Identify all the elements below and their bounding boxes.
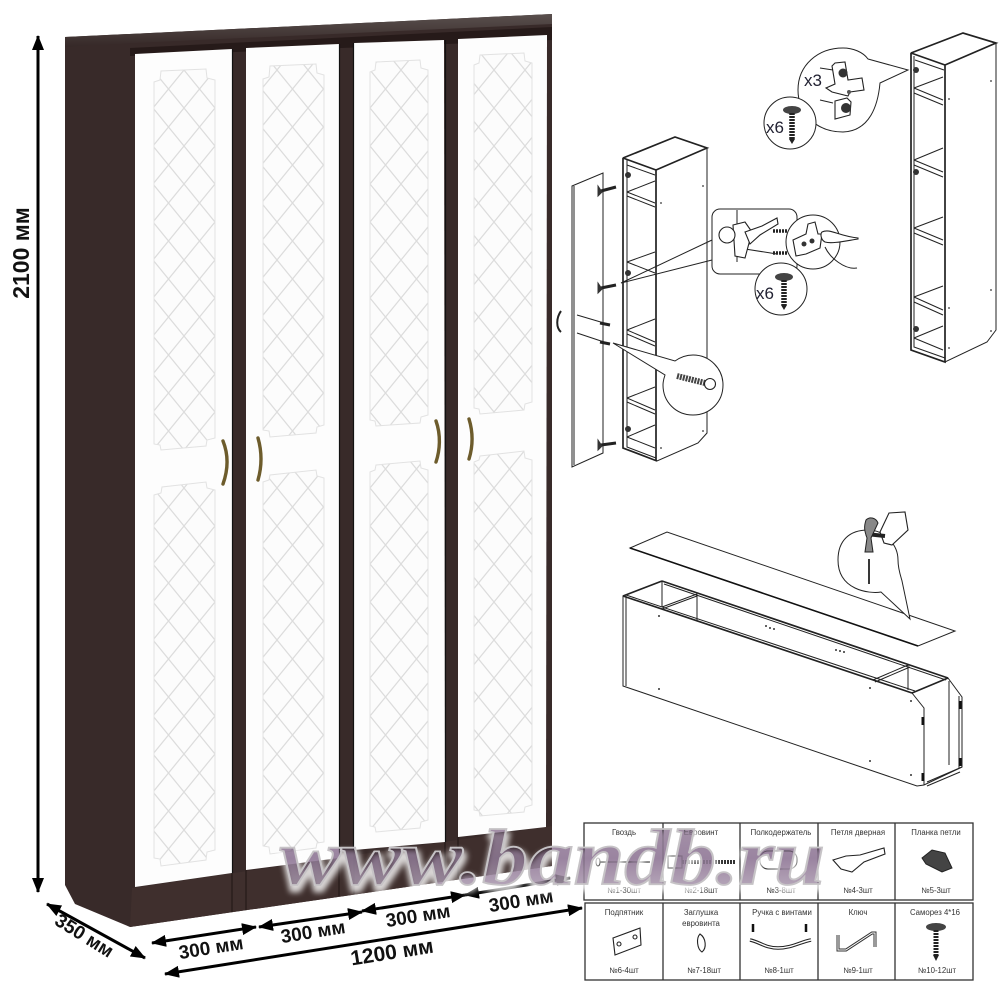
assembly: back panel being nailed (630, 532, 955, 646)
callout: screw x6 middle: x6 (756, 284, 774, 303)
part 3: shelf holder (751, 828, 811, 895)
part 4: door hinge: №4-3шт (843, 886, 873, 895)
part 3: shelf holder: Полкодержатель (751, 828, 811, 837)
part 7: euro screw cap: №7-18шт (687, 966, 721, 975)
part 2: euro screw: Евровинт (684, 828, 719, 837)
part 1: nail (596, 828, 650, 895)
part 9: hex key: №9-1шт (843, 966, 873, 975)
callout: screw x6 middle (755, 263, 807, 315)
part 7: euro screw cap: евровинта (682, 919, 721, 928)
callout: hand fixing hinge plate (786, 215, 858, 269)
top edge (65, 14, 552, 47)
part 2: euro screw (668, 828, 735, 895)
assembly: frame lying on side (623, 581, 962, 786)
door width dimensions: 300 мм (487, 886, 555, 917)
door width dimensions: 300 мм (177, 933, 245, 964)
part 8: handle with screws: №8-1шт (764, 966, 794, 975)
part 1: nail: Гвоздь (612, 828, 636, 837)
part 6: striker (605, 908, 644, 975)
part 4: door hinge (831, 828, 885, 895)
door width dimensions: 300 мм (384, 901, 452, 932)
part 10: wood screw (910, 908, 960, 975)
part 8: handle with screws (750, 908, 812, 975)
table row 2 frame (585, 903, 973, 980)
part 9: hex key: Ключ (849, 908, 867, 917)
plinth dividers (232, 837, 458, 912)
part 7: euro screw cap: Заглушка (684, 908, 719, 917)
callout: hinge plate x3: x3 (804, 71, 822, 90)
callout: hinge plate x3 (798, 48, 908, 132)
part 6: striker: №6-4шт (609, 966, 639, 975)
door 1 (135, 49, 232, 887)
part 5: hinge plate: Планка петли (911, 828, 961, 837)
icon: door handle (557, 311, 561, 332)
part 3: shelf holder: №3-8шт (766, 886, 796, 895)
parts table (584, 823, 973, 980)
callout: screw x6 top (764, 97, 816, 149)
part 7: euro screw cap (682, 908, 721, 975)
watermark: www.bandb.ru (280, 815, 825, 902)
door 4 (458, 35, 547, 837)
watermark: www.bandb.ru (281, 820, 826, 907)
part 8: handle with screws: Ручка с винтами (752, 908, 812, 917)
door width dimensions: 300 мм (279, 917, 347, 948)
total width dimension: 1200 мм (349, 935, 435, 970)
part 10: wood screw: №10-12шт (918, 966, 956, 975)
part 10: wood screw: Саморез 4*16 (910, 908, 960, 917)
base plinth shading (130, 826, 552, 927)
assembly: unit carcass with shelves (623, 137, 707, 461)
part 5: hinge plate (911, 828, 961, 895)
height dimension: 2100 мм (8, 207, 34, 299)
part 9: hex key (838, 908, 875, 975)
callout: screw x6 top: x6 (766, 118, 784, 137)
part 1: nail: №1-30шт (607, 886, 641, 895)
assembly: unit with hinge plates (911, 33, 996, 362)
part 6: striker: Подпятник (605, 908, 644, 917)
wardrobe carcass (65, 14, 552, 927)
callout: hammer and nail (838, 512, 910, 619)
part 5: hinge plate: №5-3шт (921, 886, 951, 895)
door width dimensions (152, 878, 570, 964)
watermark: www.bandb.ru (280, 815, 825, 902)
depth dimension: 350 мм (51, 910, 117, 962)
part 4: door hinge: Петля дверная (831, 828, 885, 837)
door recess shadow (130, 27, 552, 56)
assembly: door panel (572, 173, 616, 467)
door 2 (246, 44, 340, 870)
callout: euro screw (613, 343, 723, 415)
part 2: euro screw: №2-18шт (684, 886, 718, 895)
depth dimension (47, 904, 145, 962)
table row 1 frame (584, 823, 973, 900)
door 3 (354, 40, 446, 850)
wardrobe (65, 14, 552, 927)
total width dimension (165, 908, 582, 974)
callout: door hinge (621, 209, 797, 283)
